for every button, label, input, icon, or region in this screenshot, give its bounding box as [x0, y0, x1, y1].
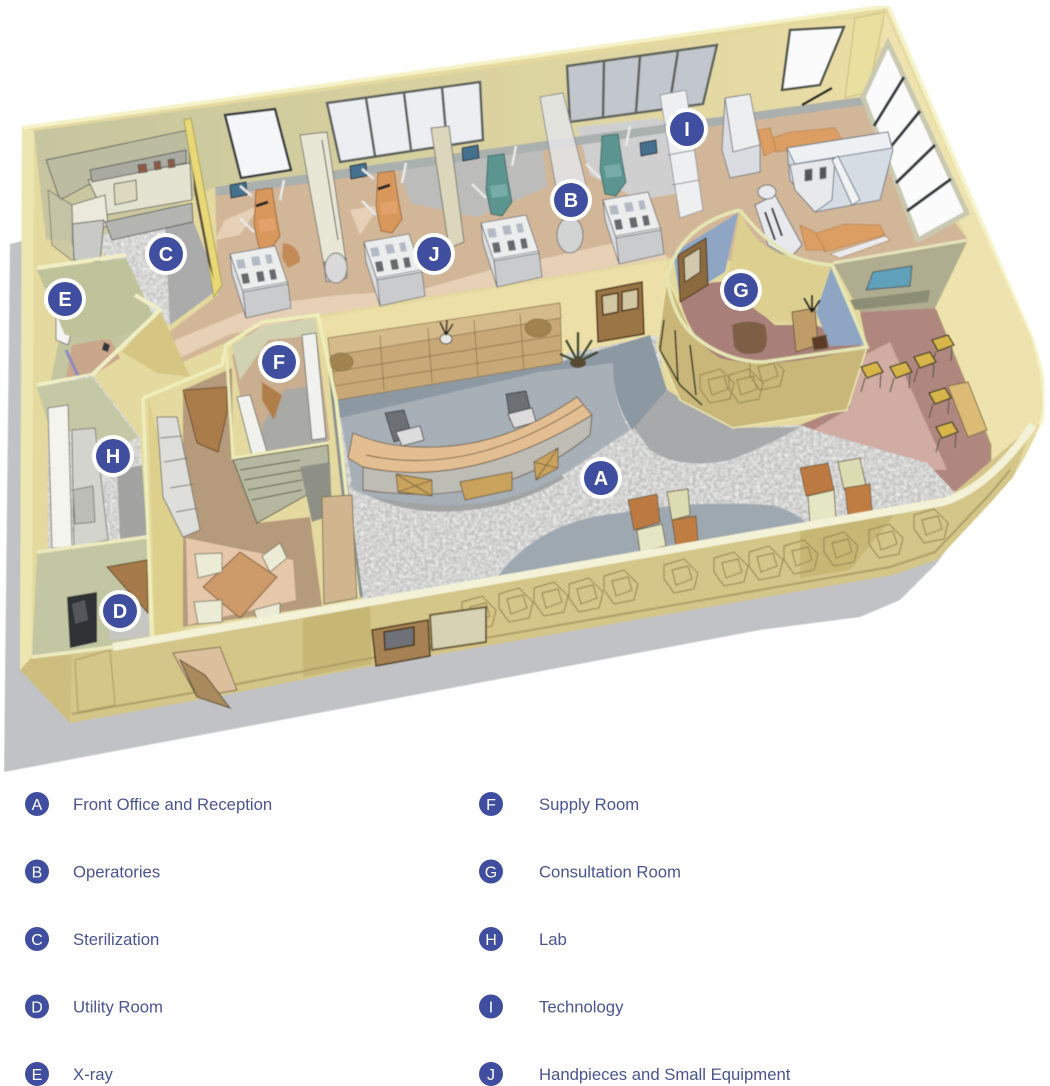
legend item I	[479, 994, 624, 1018]
legend item C: C	[31, 932, 43, 949]
sterilization cabinets	[46, 130, 193, 262]
window on right wall	[863, 43, 967, 240]
lab-to-hall wall	[148, 395, 185, 637]
operatory 5 chair	[758, 128, 842, 156]
lab wall rim	[37, 537, 147, 552]
x-ray machine	[56, 310, 110, 380]
left hand rooms	[32, 255, 358, 657]
window 4	[782, 27, 844, 90]
legend item I: I	[489, 1000, 493, 1016]
framed picture	[430, 607, 486, 650]
lower blue floor	[497, 504, 815, 577]
legend item D: D	[31, 1000, 43, 1016]
map marker D	[99, 590, 141, 632]
right wall inner edge	[935, 310, 990, 480]
map marker D: D	[113, 601, 127, 623]
legend item C: Sterilization	[73, 930, 159, 949]
front office dark floor	[337, 335, 667, 430]
reception seating	[628, 458, 872, 552]
legend item D: Utility Room	[73, 998, 163, 1016]
open door	[180, 660, 230, 708]
hall side strip	[322, 495, 357, 604]
legend item J	[479, 1062, 791, 1086]
divider with sink 1	[300, 132, 347, 283]
outer wall rim	[22, 6, 1044, 425]
sterilization floor dark half	[165, 218, 220, 325]
building cast shadow	[4, 240, 960, 772]
utility equipment	[67, 592, 97, 648]
map marker B	[550, 179, 592, 221]
left wall face	[20, 128, 34, 670]
front translucent wall	[20, 425, 1033, 723]
map marker E	[44, 278, 86, 320]
sterilization floor	[100, 218, 220, 325]
left front rim	[32, 647, 113, 657]
lounge table	[203, 552, 277, 618]
round table	[732, 322, 767, 354]
double door	[596, 282, 644, 342]
desk chairs and monitors	[385, 391, 536, 446]
map marker C	[145, 233, 187, 275]
operatory 1	[230, 180, 300, 318]
back wall	[34, 16, 870, 240]
operatory lower wall strip	[215, 97, 864, 196]
map marker G	[720, 269, 762, 311]
map marker F: F	[273, 352, 285, 374]
window 2	[327, 82, 483, 162]
glass wall	[833, 240, 968, 312]
map marker A	[580, 457, 622, 499]
reception back cabinets	[328, 303, 562, 400]
operatory equipment	[230, 88, 893, 318]
consultation room	[657, 210, 867, 428]
legend item A: A	[32, 797, 43, 814]
operatory 3	[462, 145, 542, 287]
legend item J: Handpieces and Small Equipment	[539, 1065, 791, 1084]
front office carpet	[337, 335, 957, 602]
pink waiting floor	[800, 308, 990, 492]
lounge floor	[183, 368, 322, 627]
lab floor	[48, 375, 147, 552]
ghost chairs	[700, 369, 734, 403]
x-ray room floor	[50, 320, 155, 385]
legend item D	[25, 994, 163, 1018]
legend item G	[479, 860, 681, 884]
operatory 2	[350, 163, 425, 306]
lower operatory cabinet	[755, 185, 802, 258]
operatory 6 chair	[800, 224, 890, 258]
legend item H	[479, 927, 567, 951]
lounge light patch	[186, 538, 296, 625]
lab green wall	[37, 377, 138, 447]
right wall top	[880, 12, 1042, 478]
reception desk	[348, 397, 592, 500]
right armchairs	[800, 458, 872, 524]
curved windows	[660, 320, 702, 405]
utility room wall	[32, 538, 148, 657]
supply room back wall	[232, 318, 318, 380]
translucent wall	[122, 310, 190, 377]
map marker J	[413, 233, 455, 275]
bookshelf	[792, 308, 828, 352]
x-ray wall face	[37, 258, 155, 340]
legend item J: J	[487, 1067, 495, 1084]
lounge chairs	[194, 543, 287, 624]
rim	[833, 240, 968, 263]
legend item F: F	[486, 797, 496, 814]
floor plan illustration	[4, 6, 1044, 772]
desk edge line	[366, 405, 583, 461]
corner column	[845, 12, 885, 98]
divider 2	[431, 126, 464, 248]
window 3	[567, 45, 717, 122]
rear door frame	[173, 647, 237, 697]
sterilization wall rim	[37, 255, 126, 268]
ghost chair sketches	[462, 509, 948, 630]
lounge door	[183, 387, 227, 452]
interior curved wall	[728, 210, 832, 323]
entry door	[372, 620, 430, 666]
outer walls	[20, 6, 1044, 723]
left armchairs	[628, 489, 698, 552]
wash basin	[866, 266, 912, 290]
legend item B	[25, 860, 160, 884]
blue wall	[673, 213, 738, 300]
desk panels	[396, 448, 558, 500]
legend item A: Front Office and Reception	[73, 795, 272, 814]
utility room door	[107, 560, 148, 613]
legend	[25, 792, 791, 1086]
legend item C	[25, 927, 159, 951]
legend item A	[25, 792, 272, 816]
operatory floor	[135, 97, 968, 372]
angled wall rim	[37, 295, 160, 385]
front wall rim	[113, 425, 1033, 647]
operatory grey floor	[400, 150, 547, 217]
supply room floor	[232, 320, 330, 458]
left lower wall sketch	[75, 650, 115, 712]
legend item H: Lab	[539, 930, 567, 949]
map marker F	[258, 341, 300, 383]
right blue wall	[816, 265, 864, 346]
lab to hall rim	[143, 398, 152, 637]
outer curved wall	[657, 277, 867, 428]
flower vase	[804, 295, 820, 312]
legend item E: X-ray	[73, 1065, 114, 1084]
legend item G: G	[485, 864, 497, 882]
lab cabinet	[48, 405, 108, 548]
desk front	[363, 415, 592, 494]
utility floor	[105, 590, 150, 640]
map marker G: G	[733, 280, 749, 302]
supply shelves	[237, 333, 326, 455]
left corner face	[20, 655, 72, 723]
supply room rims	[143, 315, 358, 598]
legend item B: Operatories	[73, 862, 160, 882]
operatory 4	[586, 126, 664, 264]
large operatory cabinet	[787, 132, 893, 212]
front office blue floor	[340, 363, 630, 505]
dark carpet arc under desk	[350, 470, 565, 512]
dental light arm	[802, 88, 832, 105]
glass corner room	[833, 240, 968, 312]
map marker I	[666, 108, 708, 150]
legend item H: H	[485, 932, 497, 949]
desk top	[348, 397, 592, 472]
map marker C: C	[159, 244, 173, 266]
base moulding	[72, 470, 1010, 714]
operatory light patches	[165, 235, 668, 365]
legend item E: E	[32, 1067, 42, 1084]
reception wall behind cabinets	[320, 260, 668, 400]
plant on cabinet	[440, 320, 453, 344]
reception left side strip	[327, 360, 363, 599]
waiting area chairs	[861, 335, 987, 452]
side table	[948, 382, 987, 437]
divider 3	[540, 93, 590, 253]
map marker I: I	[684, 119, 690, 141]
map marker A: A	[594, 468, 608, 490]
window 1	[225, 109, 291, 178]
potted plant	[560, 332, 598, 368]
technology shelving	[660, 90, 703, 218]
dark carpet arc right	[633, 390, 800, 463]
legend item I: Technology	[539, 998, 624, 1016]
stairs	[233, 445, 330, 523]
map marker B: B	[564, 190, 578, 212]
partition wall: sterilization	[184, 118, 222, 297]
legend item F	[479, 792, 639, 816]
room floor	[680, 282, 864, 363]
legend item G: Consultation Room	[539, 862, 681, 882]
legend item B: B	[32, 864, 42, 882]
lighter pink floor band	[810, 342, 947, 470]
wall shading patch	[303, 603, 372, 677]
map marker H	[92, 435, 134, 477]
room door	[678, 238, 708, 302]
front wall face	[20, 425, 1033, 723]
map marker E: E	[58, 289, 72, 311]
mesh grid	[300, 462, 332, 522]
map marker J: J	[428, 244, 440, 266]
legend item E	[25, 1062, 114, 1086]
map marker H: H	[106, 446, 120, 468]
corner cabinets	[722, 94, 760, 178]
lounge shelves	[157, 417, 200, 537]
supply door	[262, 382, 282, 420]
legend item F: Supply Room	[539, 795, 639, 814]
curved rim	[667, 210, 867, 362]
